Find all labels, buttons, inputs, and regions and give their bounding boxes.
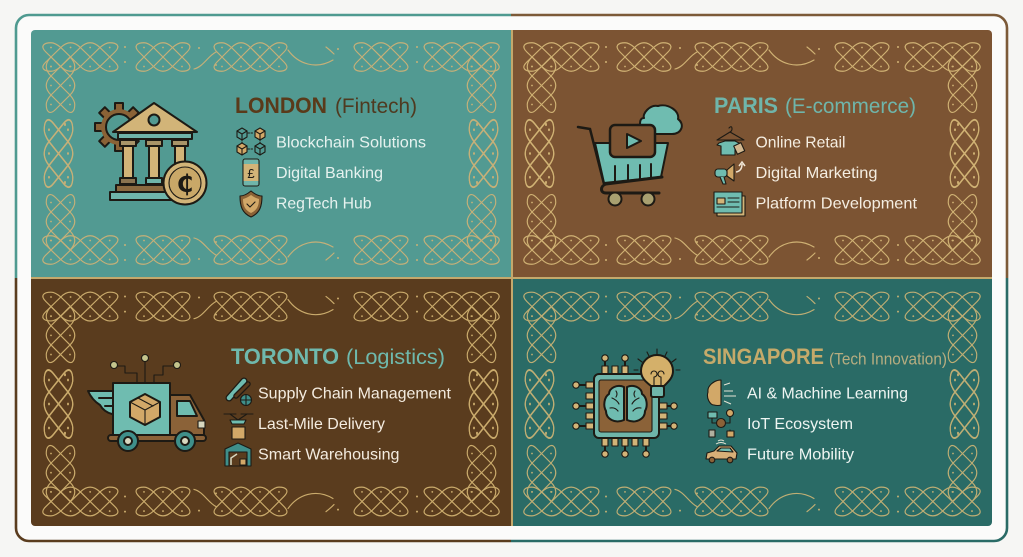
icon: shopping cart with cloud and video (578, 105, 682, 206)
icon: phone with pound (243, 159, 259, 186)
icon: brain with circuits (707, 380, 736, 405)
icon: drone with parcel (224, 414, 253, 439)
text: AI & Machine Learning: AI & Machine Learning (747, 386, 908, 403)
ornament border: Singapore (524, 292, 980, 516)
text: Supply Chain Management: Supply Chain Management (258, 386, 452, 403)
heading: London: LONDON (235, 93, 327, 118)
text: IoT Ecosystem: IoT Ecosystem (747, 416, 853, 433)
heading: London (235, 93, 417, 118)
heading: Paris: (E-commerce) (785, 95, 916, 118)
icon: IoT network (708, 410, 734, 437)
panel: Singapore (511, 278, 992, 526)
icon: shield (240, 191, 262, 217)
heading: Paris (714, 93, 916, 118)
icon: phone with pound: £ (247, 166, 255, 181)
heading: Paris: PARIS (714, 93, 778, 118)
text: Future Mobility: Future Mobility (747, 447, 854, 464)
icon: blockchain cubes (237, 128, 265, 155)
text: Blockchain Solutions: Blockchain Solutions (276, 134, 426, 152)
icon: bank with gear and coin: ₵ (177, 170, 193, 198)
heading: Singapore (703, 344, 947, 369)
icon: connected car (706, 440, 737, 463)
text: Smart Warehousing: Smart Warehousing (258, 447, 400, 464)
heading: Toronto: (Logistics) (346, 346, 445, 369)
icon: browser stack (714, 192, 745, 216)
text: Last-Mile Delivery: Last-Mile Delivery (258, 416, 385, 433)
heading: Toronto (231, 344, 445, 369)
panel: Paris (511, 30, 992, 278)
heading: Toronto: TORONTO (231, 344, 339, 369)
ornament border: London (43, 43, 499, 264)
icon: delivery truck (88, 354, 206, 451)
icon: chip with brain and light bulb (573, 349, 680, 457)
icon: chain link and globe (229, 381, 252, 406)
text: Digital Marketing: Digital Marketing (756, 165, 878, 182)
icon: megaphone (715, 162, 745, 184)
panel: Toronto (31, 278, 511, 526)
ornament border: Toronto (43, 292, 499, 516)
icon: bank with gear and coin (95, 103, 206, 204)
text: RegTech Hub: RegTech Hub (276, 196, 372, 212)
icon: hanger and shirt (717, 127, 745, 155)
panel: London (31, 30, 511, 278)
heading: Singapore: SINGAPORE (703, 344, 824, 369)
heading: Singapore: (Tech Innovation) (829, 350, 947, 368)
heading: London: (Fintech) (335, 95, 417, 118)
text: Digital Banking: Digital Banking (276, 165, 383, 182)
text: Platform Development: Platform Development (756, 196, 918, 212)
ornament border: Paris (524, 43, 980, 264)
icon: smart warehouse (225, 443, 251, 466)
text: Online Retail: Online Retail (756, 134, 846, 152)
